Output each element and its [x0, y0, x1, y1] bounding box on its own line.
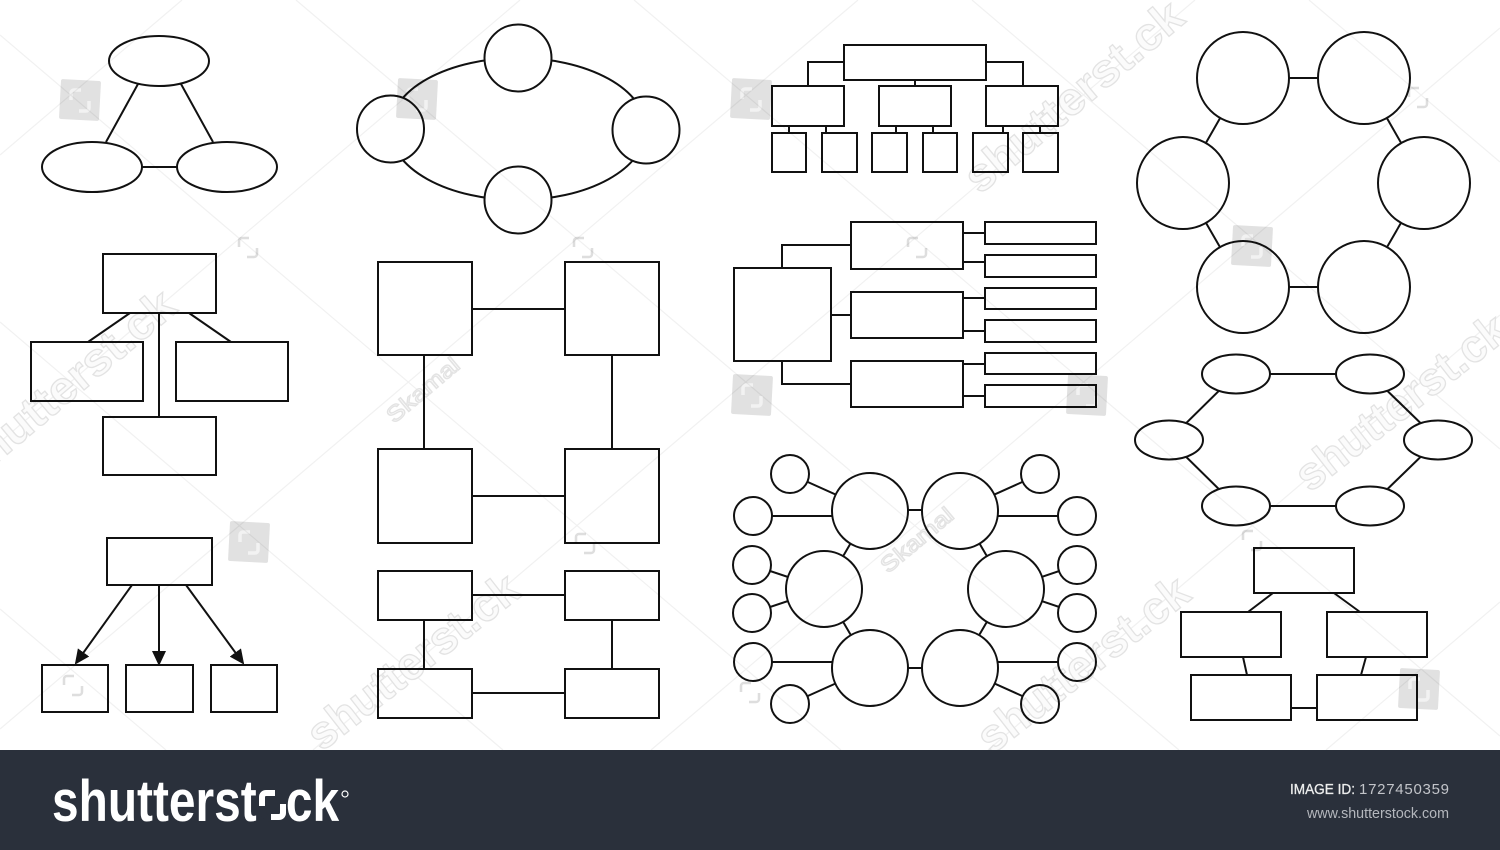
- diagram: four square loop: [378, 262, 659, 543]
- diagram: org chart top: [772, 45, 1058, 172]
- footer logo: shutterstock: [52, 770, 340, 834]
- image id: [1290, 781, 1449, 798]
- diagram: four rectangle loop: [378, 571, 659, 718]
- diagram: bubble cluster: [733, 455, 1096, 723]
- diagram: three ellipse triangle: [42, 36, 277, 192]
- watermark: diagonal lattice and outlined text: Skamal: [381, 352, 465, 428]
- watermark: diagonal lattice and outlined text: Skamal: [875, 502, 959, 578]
- diagram: four rectangle tree: [31, 254, 288, 475]
- diagram: ring of four circles: [357, 24, 680, 234]
- watermark: grey logo squares: [59, 78, 1440, 710]
- image id: 1727450359: [1359, 781, 1449, 798]
- diagram: arrows tree: [42, 538, 277, 712]
- watermark: diagonal lattice and outlined text: shutterst.ck: [296, 562, 529, 760]
- image id: IMAGE ID:: [1290, 781, 1355, 798]
- watermark: diagonal lattice and outlined text: shutterst.ck: [966, 565, 1199, 763]
- diagram: five rectangle tree: [1181, 548, 1427, 720]
- website: www.shutterstock.com: [1306, 806, 1449, 822]
- diagram: horizontal tree: [734, 222, 1096, 407]
- footer bar: [0, 750, 1500, 850]
- diagram: ring of six ellipses: [1135, 354, 1472, 526]
- diagram: ring of six circles: [1137, 32, 1470, 333]
- watermark: diagonal lattice and outlined text: shutterst.ck: [953, 0, 1194, 203]
